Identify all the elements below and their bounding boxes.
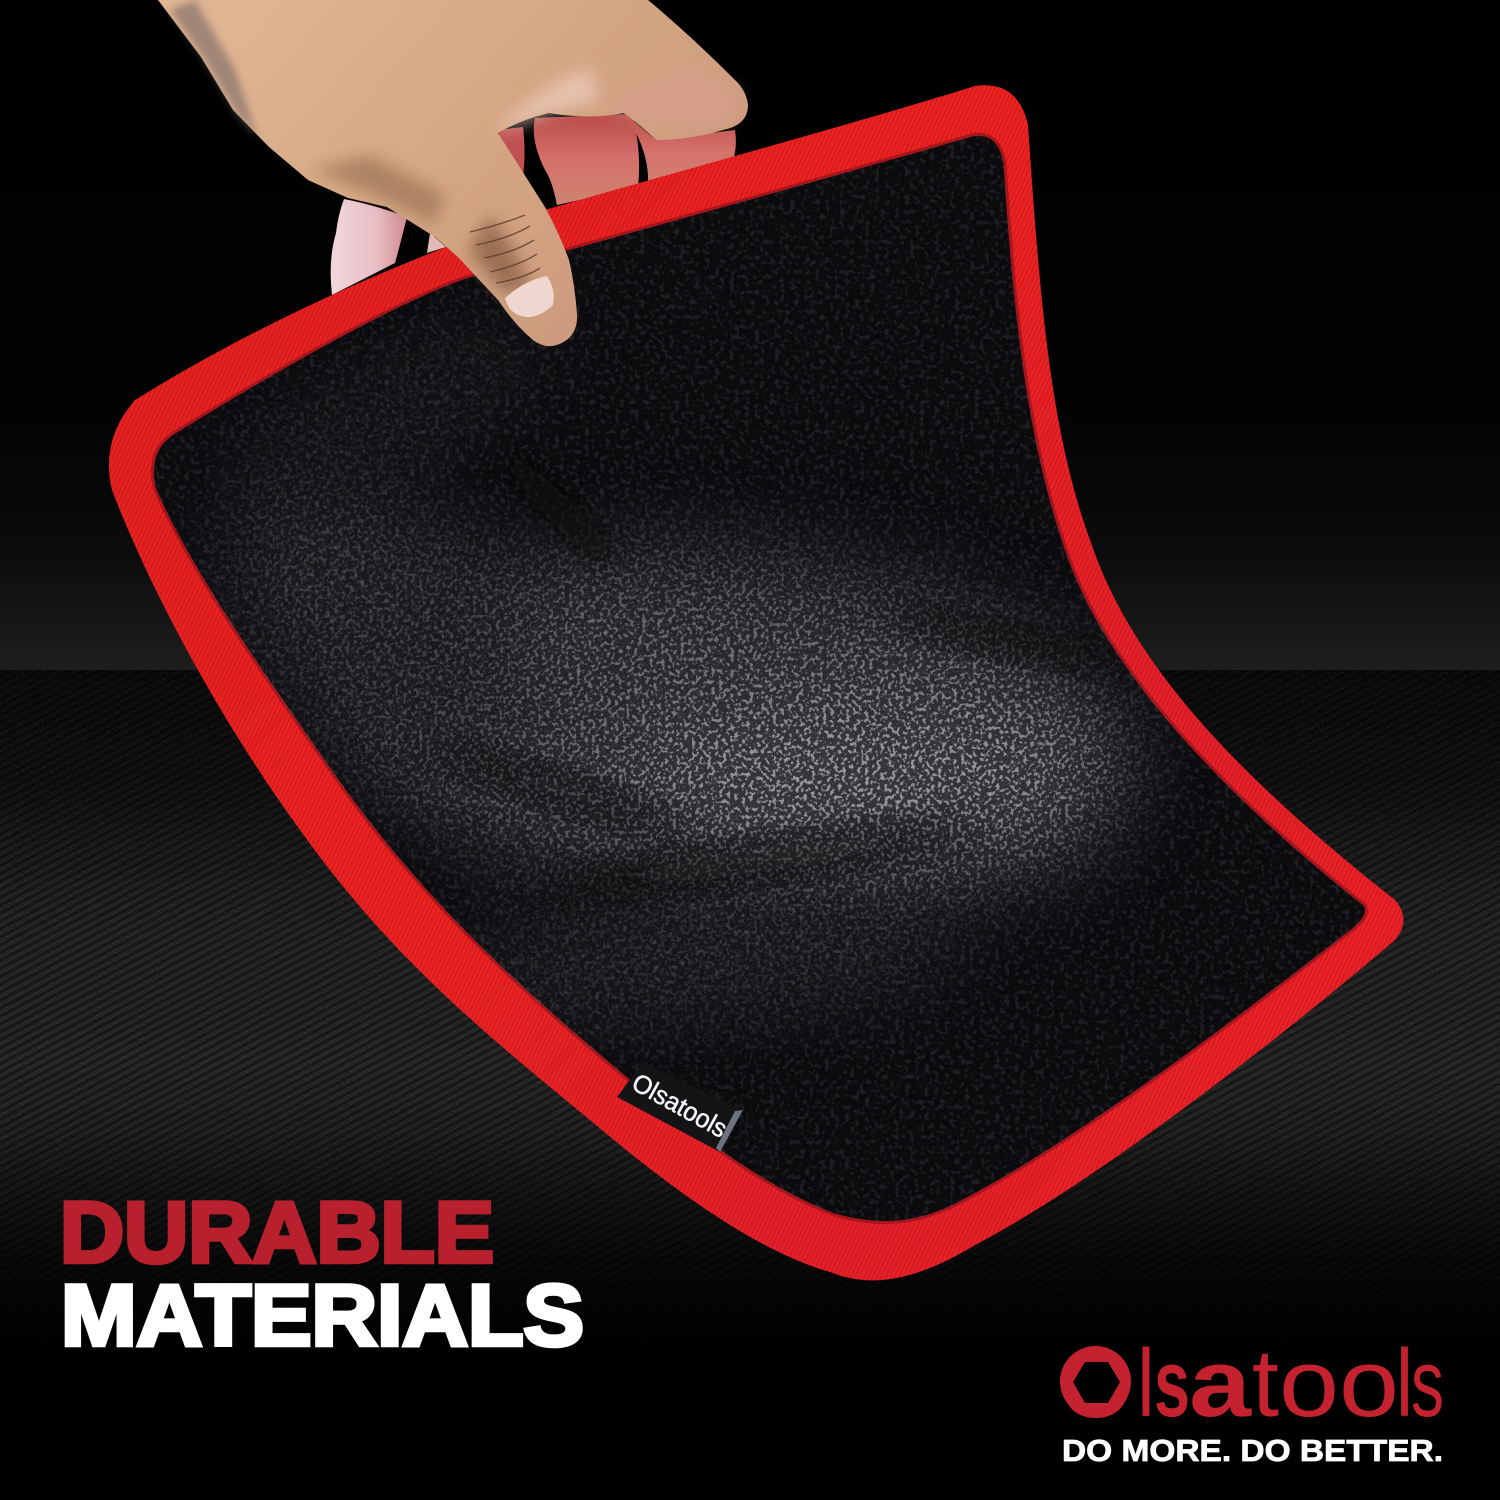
mat: black leather surface — [140, 120, 1380, 1230]
fingers behind the mat — [331, 113, 736, 295]
headline: MATERIALS — [61, 1268, 584, 1364]
mat: red fabric border — [109, 85, 1404, 1280]
thumb wrinkles — [470, 215, 540, 283]
logo wordmark: o — [1279, 1330, 1339, 1437]
logo wordmark: s — [1411, 1330, 1444, 1437]
logo wordmark: l — [1139, 1330, 1153, 1437]
small woven brand tag: Olsatools — [627, 1067, 733, 1144]
thumbnail — [505, 276, 554, 317]
logo wordmark: a — [1189, 1330, 1252, 1437]
logo wordmark: O — [1059, 1331, 1133, 1438]
background: textured floor — [0, 670, 1500, 1500]
logo wordmark: o — [1339, 1330, 1399, 1437]
logo wordmark: l — [1396, 1330, 1413, 1437]
headline — [60, 1185, 584, 1364]
logo wordmark: t — [1252, 1330, 1279, 1437]
wrinkle shadows — [423, 451, 1120, 906]
logo: Olsatools with tagline — [1059, 1330, 1444, 1468]
tagline: DO MORE. DO BETTER. — [1062, 1433, 1443, 1468]
hand holding the mat — [158, 0, 748, 346]
logo wordmark — [1059, 1330, 1444, 1438]
headline: DURABLE — [60, 1185, 494, 1281]
logo wordmark: s — [1154, 1330, 1190, 1437]
background: dark studio wall — [0, 0, 1500, 672]
